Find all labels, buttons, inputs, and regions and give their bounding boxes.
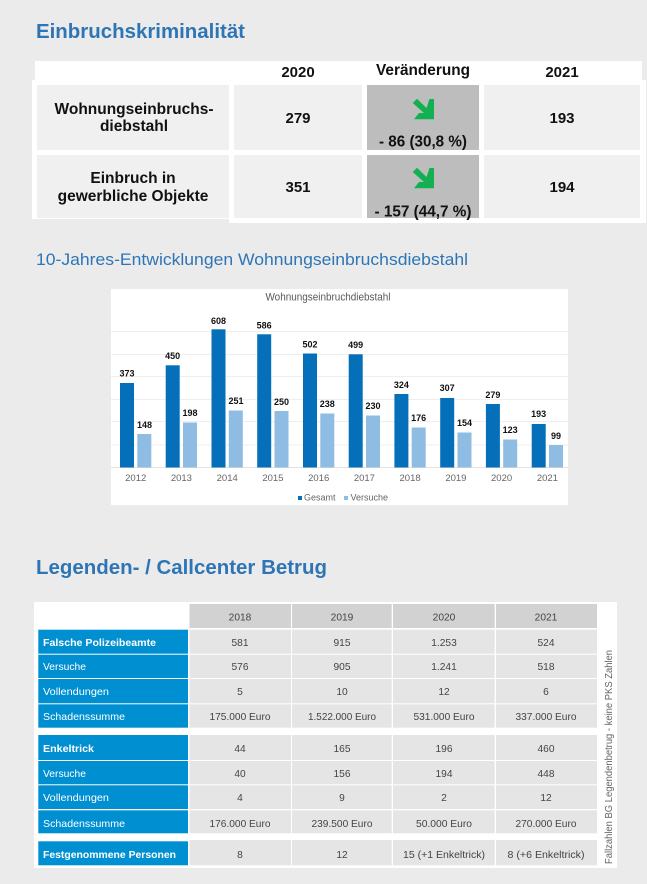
group: Falsche Polizeibeamte bbox=[38, 630, 597, 728]
group: Falsche Polizeibeamte: 12 bbox=[438, 687, 450, 698]
group: Enkeltrick: 44 bbox=[234, 744, 246, 755]
row: Einbruch in gewerbliche Objekte bbox=[37, 155, 640, 220]
panel: Legendenbetrug table bbox=[34, 602, 617, 868]
data labels: 279 bbox=[485, 390, 500, 400]
group: Falsche Polizeibeamte: Versuche bbox=[43, 661, 86, 673]
group: Falsche Polizeibeamte: 6 bbox=[543, 687, 549, 698]
group: Falsche Polizeibeamte: Falsche Polizeibeamte bbox=[43, 637, 156, 649]
data labels: 230 bbox=[365, 401, 381, 411]
data labels: 373 bbox=[119, 368, 135, 378]
group: Falsche Polizeibeamte: 581 bbox=[232, 638, 249, 649]
data labels: 251 bbox=[228, 396, 244, 406]
data labels bbox=[119, 316, 561, 441]
group: Enkeltrick: 270.000 Euro bbox=[516, 819, 577, 830]
data labels: 123 bbox=[503, 425, 518, 435]
row: Festgenommene Personen: 8 bbox=[237, 850, 243, 861]
data labels: 198 bbox=[182, 408, 198, 418]
group: Enkeltrick: 176.000 Euro bbox=[210, 819, 271, 830]
table header row: 2019 bbox=[331, 612, 354, 624]
group: Enkeltrick: Vollendungen bbox=[43, 792, 109, 804]
group: Enkeltrick: 196 bbox=[436, 744, 453, 755]
group: Falsche Polizeibeamte: 1.253 bbox=[431, 638, 457, 649]
group: Enkeltrick: Versuche bbox=[43, 768, 86, 780]
legend: Gesamt bbox=[304, 493, 336, 503]
table header row: 2021 bbox=[535, 612, 558, 624]
group: Enkeltrick: 4 bbox=[237, 793, 243, 804]
row: Wohnungseinbruchsdiebstahl: diebstahl bbox=[100, 118, 168, 135]
group: Falsche Polizeibeamte: 531.000 Euro bbox=[414, 712, 475, 723]
row: Wohnungseinbruchsdiebstahl: 279 bbox=[285, 110, 311, 127]
group: Enkeltrick: 50.000 Euro bbox=[416, 819, 472, 830]
group: Falsche Polizeibeamte: 5 bbox=[237, 687, 243, 698]
table header: 2021: 2021 bbox=[545, 64, 579, 81]
x axis years: 2018 bbox=[400, 473, 421, 484]
table header row: 2018 bbox=[229, 612, 252, 624]
x axis years: 2014 bbox=[217, 473, 238, 484]
group: Enkeltrick: 448 bbox=[538, 769, 555, 780]
row: Wohnungseinbruchsdiebstahl: Wohnungseinbruchs- bbox=[54, 101, 214, 118]
x axis years bbox=[125, 473, 558, 484]
row: Einbruch in gewerbliche Objekte: 194 bbox=[549, 179, 575, 196]
group: Falsche Polizeibeamte: Schadenssumme bbox=[43, 711, 125, 723]
group: Falsche Polizeibeamte: 518 bbox=[538, 662, 555, 673]
panel: comparison table 2020 vs 2021 bbox=[32, 61, 646, 223]
group: Enkeltrick: 194 bbox=[436, 769, 453, 780]
table header: Veränderung: Veränderung bbox=[376, 62, 470, 79]
side note: vertical source text: Fallzahlen BG Legendenbetrug - keine PKS Zahlen bbox=[603, 650, 615, 864]
x axis years: 2012 bbox=[125, 473, 146, 484]
icon: green arrow down-right bbox=[413, 168, 434, 188]
row: Festgenommene Personen: 15 (+1 Enkeltrick) bbox=[403, 850, 485, 861]
group: Enkeltrick: 12 bbox=[540, 793, 552, 804]
data labels: 238 bbox=[320, 399, 335, 409]
heading: 10-Jahres-Entwicklungen: 10-Jahres-Entwicklungen Wohnungseinbruchsdiebstahl bbox=[36, 250, 468, 269]
group: Falsche Polizeibeamte: 524 bbox=[538, 638, 555, 649]
x axis years: 2020 bbox=[491, 473, 512, 484]
row: Einbruch in gewerbliche Objekte: Einbruch in bbox=[90, 170, 176, 187]
legend bbox=[298, 493, 388, 503]
x axis years: 2017 bbox=[354, 473, 375, 484]
group: Falsche Polizeibeamte: 337.000 Euro bbox=[516, 712, 577, 723]
data labels: 176 bbox=[411, 413, 426, 423]
group: Enkeltrick: 156 bbox=[334, 769, 351, 780]
row: Einbruch in gewerbliche Objekte: gewerbliche Objekte bbox=[58, 188, 209, 205]
bars: Gesamt bbox=[120, 329, 546, 468]
group: Enkeltrick: 9 bbox=[339, 793, 345, 804]
group: Enkeltrick bbox=[38, 735, 597, 833]
row: Festgenommene Personen bbox=[38, 840, 597, 865]
data labels: 608 bbox=[211, 316, 226, 326]
icon: green arrow down-right bbox=[413, 99, 434, 119]
row: Einbruch in gewerbliche Objekte: - 157 (44,7 %) bbox=[374, 204, 472, 220]
heading: Legenden- / Callcenter Betrug: Legenden- / Callcenter Betrug bbox=[36, 557, 327, 579]
data labels: 148 bbox=[137, 420, 152, 430]
x axis years: 2015 bbox=[262, 473, 283, 484]
group: Falsche Polizeibeamte: Vollendungen bbox=[43, 686, 109, 698]
title: Einbruchskriminalität: Einbruchskriminalität bbox=[36, 21, 245, 43]
row: Festgenommene Personen: 12 bbox=[336, 850, 348, 861]
row: Wohnungseinbruchsdiebstahl: - 86 (30,8 %) bbox=[379, 134, 467, 150]
group: Falsche Polizeibeamte: 905 bbox=[334, 662, 351, 673]
legend: Versuche bbox=[350, 493, 388, 503]
data labels: 154 bbox=[457, 418, 472, 428]
data labels: 499 bbox=[348, 340, 363, 350]
group: Falsche Polizeibeamte: 915 bbox=[334, 638, 351, 649]
row: Festgenommene Personen: 8 (+6 Enkeltrick) bbox=[508, 850, 584, 861]
data labels: 250 bbox=[274, 397, 289, 407]
data labels: 324 bbox=[394, 380, 409, 390]
x axis years: 2021 bbox=[537, 473, 558, 484]
bars: Versuche bbox=[137, 410, 563, 468]
group: Enkeltrick: 165 bbox=[334, 744, 351, 755]
group: Enkeltrick: 460 bbox=[538, 744, 555, 755]
table header: 2020: 2020 bbox=[281, 64, 315, 81]
data labels: 99 bbox=[551, 431, 561, 441]
group: Enkeltrick: Enkeltrick bbox=[43, 743, 94, 755]
x axis years: 2016 bbox=[308, 473, 329, 484]
table header row: 2020 bbox=[433, 612, 456, 624]
row: Wohnungseinbruchsdiebstahl: 193 bbox=[549, 110, 575, 127]
group: Enkeltrick: 2 bbox=[441, 793, 447, 804]
table header row bbox=[190, 604, 597, 628]
chart title: Wohnungseinbruchdiebstahl bbox=[266, 292, 390, 304]
group: Falsche Polizeibeamte: 1.241 bbox=[431, 662, 457, 673]
bar chart: Wohnungseinbruchdiebstahl bbox=[111, 289, 568, 505]
group: Enkeltrick: Schadenssumme bbox=[43, 818, 125, 830]
group: Falsche Polizeibeamte: 576 bbox=[232, 662, 249, 673]
data labels: 502 bbox=[302, 340, 318, 350]
group: Enkeltrick: 40 bbox=[234, 769, 246, 780]
group: Falsche Polizeibeamte: 1.522.000 Euro bbox=[308, 712, 376, 723]
data labels: 307 bbox=[440, 383, 455, 393]
group: Enkeltrick: 239.500 Euro bbox=[312, 819, 373, 830]
row: Wohnungseinbruchsdiebstahl bbox=[37, 85, 640, 150]
group: Falsche Polizeibeamte: 175.000 Euro bbox=[210, 712, 271, 723]
data labels: 450 bbox=[165, 351, 180, 361]
x axis years: 2013 bbox=[171, 473, 192, 484]
row: Einbruch in gewerbliche Objekte: 351 bbox=[285, 179, 311, 196]
x axis years: 2019 bbox=[445, 473, 466, 484]
data labels: 586 bbox=[257, 320, 272, 330]
data labels: 193 bbox=[531, 409, 546, 419]
group: Falsche Polizeibeamte: 10 bbox=[336, 687, 348, 698]
row: Festgenommene Personen: Festgenommene Personen bbox=[43, 849, 176, 861]
